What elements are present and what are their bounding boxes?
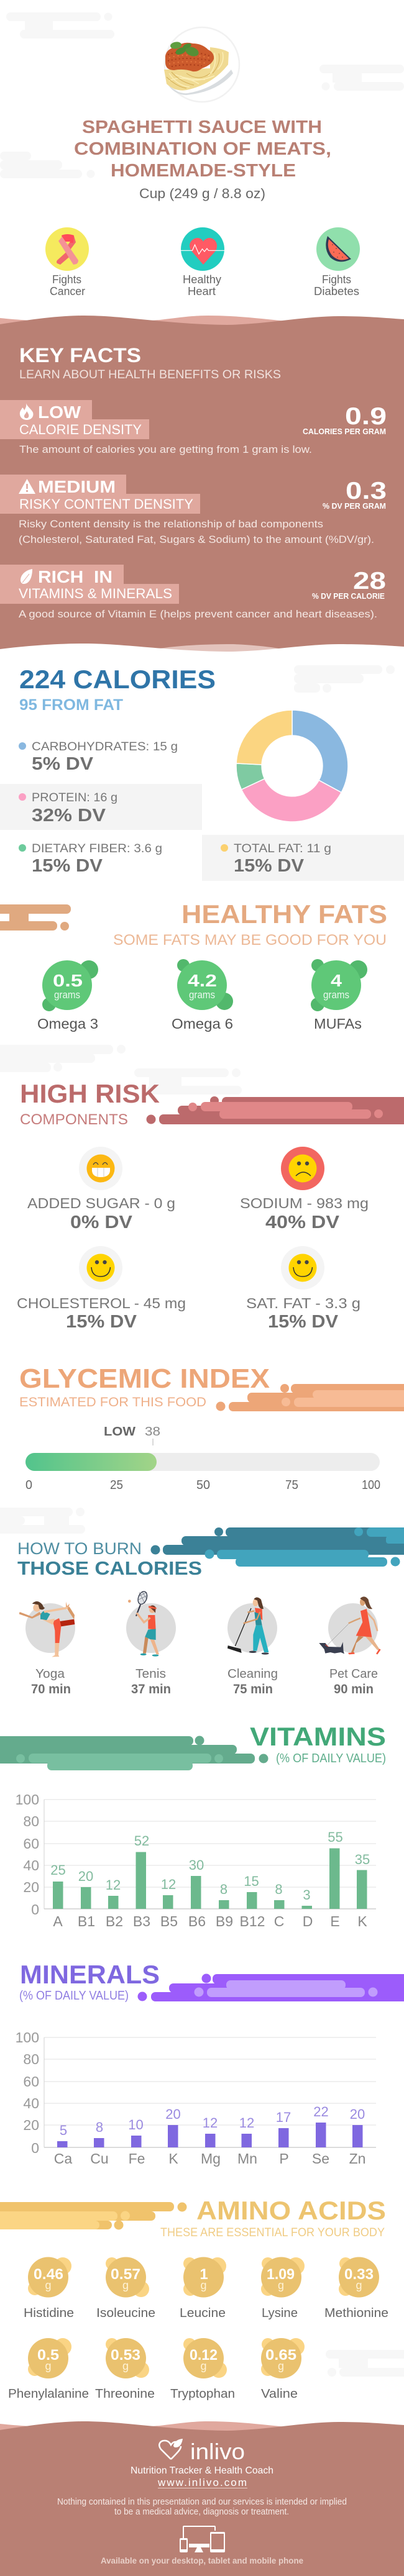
amino: isoleucine: 0.57 — [111, 2266, 140, 2283]
fat: omega 6 — [172, 959, 233, 1032]
inlivo logo: inlivo — [190, 2439, 245, 2464]
glycemic index heading: GLYCEMIC INDEX — [19, 1363, 270, 1394]
background cloud behind high risk — [134, 1068, 242, 1095]
banner: amino acids — [0, 2202, 186, 2230]
bar chart: minerals: 20 — [165, 2106, 181, 2122]
amino: threonine: 0.53 — [111, 2347, 140, 2364]
risk: sodium — [240, 1147, 369, 1232]
fact: low calorie density: CALORIES PER GRAM — [303, 427, 386, 436]
fact: rich in vitamins and minerals: RICH IN — [38, 567, 112, 586]
bar chart: minerals: P — [279, 2150, 289, 2167]
risk: saturated fat — [246, 1246, 360, 1332]
macro: protein — [0, 784, 202, 830]
icon: devices — [180, 2526, 225, 2552]
glycemic index gauge: 50 — [196, 1478, 210, 1492]
fact: medium risky content density: (Cholesterol, Saturated Fat, Sugars & Sodium) to the amount (%DV/gr). — [19, 534, 374, 545]
background cloud left of title — [0, 152, 94, 178]
amino: tryptophan — [170, 2338, 235, 2401]
bar chart: vitamins: D — [303, 1913, 313, 1929]
risk: saturated fat: 15% DV — [268, 1312, 339, 1332]
food photo: spaghetti with sauce on plate — [164, 27, 239, 102]
fact: low calorie density: LOW — [38, 403, 81, 422]
title: COMBINATION OF MEATS, — [74, 139, 331, 159]
amino: valine — [261, 2338, 305, 2401]
amino: histidine: g — [45, 2279, 52, 2292]
fat: omega 6: 4.2 — [188, 971, 217, 990]
bar chart: minerals: 5 — [60, 2123, 67, 2138]
macro: carbohydrates: 5% DV — [32, 754, 94, 774]
amino: phenylalanine — [8, 2338, 89, 2401]
fat: omega 3: grams — [54, 989, 80, 1001]
benefit: fights diabetes — [314, 227, 360, 298]
fat: MUFAs: grams — [323, 989, 349, 1001]
macro: dietary fiber: 15% DV — [32, 856, 103, 876]
benefit: healthy heart: Heart — [188, 285, 216, 298]
amino: methionine: Methionine — [324, 2306, 388, 2320]
bar chart: minerals: 17 — [276, 2109, 291, 2125]
bar chart: vitamins: K — [357, 1913, 367, 1929]
amino: phenylalanine: Phenylalanine — [8, 2387, 89, 2401]
bar chart: minerals: 60 — [23, 2073, 39, 2090]
healthy fats heading: HEALTHY FATS — [181, 899, 387, 929]
benefit: healthy heart: Healthy — [183, 273, 221, 286]
glycemic index subheading: ESTIMATED FOR THIS FOOD — [19, 1395, 206, 1409]
amino acids heading: AMINO ACIDS — [196, 2196, 386, 2225]
inlivo logo — [159, 2439, 245, 2464]
bar chart: minerals: 100 — [16, 2029, 39, 2046]
activity: pet care: 90 min — [334, 1682, 374, 1696]
glycemic index gauge: 100 — [362, 1478, 380, 1492]
benefit: fights diabetes: Diabetes — [314, 285, 359, 298]
risk: saturated fat: SAT. FAT - 3.3 g — [246, 1295, 360, 1311]
tagline: Nutrition Tracker & Health Coach — [131, 2465, 273, 2476]
bar chart: vitamins: B12 — [240, 1913, 265, 1929]
calories from fat: 95 FROM FAT — [19, 696, 123, 714]
bar chart: vitamins: E — [330, 1913, 340, 1929]
glycemic index gauge: LOW — [104, 1425, 135, 1439]
title — [74, 117, 331, 181]
bar chart: minerals: 8 — [96, 2119, 103, 2135]
how to burn heading line 1: HOW TO BURN — [17, 1539, 142, 1558]
amino: threonine: g — [122, 2360, 129, 2372]
risk: added sugar — [27, 1147, 175, 1232]
bar chart: vitamins: B9 — [216, 1913, 233, 1929]
fact: rich in vitamins and minerals: A good source of Vitamin E (helps prevent cancer and heart diseases). — [19, 608, 377, 620]
risk: added sugar: ADDED SUGAR - 0 g — [27, 1195, 175, 1211]
risk: sodium: SODIUM - 983 mg — [240, 1195, 369, 1211]
bar chart: vitamins: 12 — [106, 1877, 121, 1893]
fact: low calorie density: The amount of calories you are getting from 1 gram is low. — [19, 444, 312, 455]
fact: low calorie density: CALORIE DENSITY — [19, 422, 142, 437]
fact: rich in vitamins and minerals: 28 — [353, 568, 386, 594]
bar chart: minerals: 0 — [31, 2140, 39, 2156]
vitamins subheading: (% OF DAILY VALUE) — [276, 1752, 386, 1765]
disclaimer: to be a medical advice, diagnosis or treatment. — [114, 2507, 289, 2517]
amino: tryptophan: g — [200, 2360, 207, 2372]
amino: histidine: 0.46 — [34, 2266, 63, 2283]
macro: total fat: TOTAL FAT: 11 g — [234, 842, 331, 855]
disclaimer: Nothing contained in this presentation and our services is intended or implied — [57, 2497, 347, 2507]
activity: pet care: Pet Care — [329, 1667, 378, 1681]
amino acids subheading: THESE ARE ESSENTIAL FOR YOUR BODY — [160, 2226, 385, 2239]
fact: medium risky content density — [0, 475, 387, 545]
amino: lysine: Lysine — [262, 2306, 298, 2320]
fact: rich in vitamins and minerals: VITAMINS & MINERALS — [19, 586, 172, 601]
title: SPAGHETTI SAUCE WITH — [82, 117, 322, 137]
background cloud top right — [319, 65, 404, 91]
risk: sodium: 40% DV — [265, 1213, 340, 1232]
how to burn heading line 2: THOSE CALORIES — [17, 1557, 202, 1579]
amino: leucine: g — [200, 2279, 207, 2292]
activity: yoga — [19, 1601, 75, 1696]
bar chart: minerals — [16, 2029, 376, 2167]
fact: rich in vitamins and minerals: % DV PER CALORIE — [312, 591, 385, 601]
macro: protein: PROTEIN: 16 g — [32, 791, 117, 804]
availability note: Available on your desktop, tablet and mobile phone — [101, 2556, 303, 2565]
bar chart: vitamins: 25 — [50, 1862, 66, 1878]
bar chart: minerals: 20 — [350, 2106, 365, 2122]
amino: histidine: Histidine — [24, 2306, 74, 2320]
background cloud left of high risk — [0, 1045, 126, 1072]
amino: methionine — [324, 2257, 388, 2320]
bar chart: vitamins: B3 — [133, 1913, 150, 1929]
activity: pet care — [319, 1596, 381, 1696]
fat: omega 3: Omega 3 — [37, 1016, 98, 1032]
fact: medium risky content density: Risky Content density is the relationship of bad components — [19, 518, 323, 530]
key facts heading: KEY FACTS — [19, 344, 141, 366]
bar chart: vitamins: B2 — [106, 1913, 123, 1929]
panel: key facts background — [0, 316, 404, 658]
glycemic index gauge: 38 — [145, 1425, 160, 1439]
amino: leucine: 1 — [200, 2266, 208, 2283]
high risk subheading: COMPONENTS — [20, 1111, 128, 1128]
banner: vitamins — [0, 1736, 269, 1770]
bar chart: minerals: 12 — [203, 2115, 218, 2131]
macro: carbohydrates: CARBOHYDRATES: 15 g — [32, 740, 178, 753]
bar chart: minerals: Ca — [54, 2150, 72, 2167]
amino: methionine: 0.33 — [344, 2266, 374, 2283]
fact: medium risky content density: MEDIUM — [38, 477, 116, 496]
bar chart: vitamins: 0 — [31, 1901, 39, 1918]
amino: leucine: Leucine — [180, 2306, 226, 2320]
bar chart: vitamins: 8 — [275, 1882, 283, 1897]
amino: histidine — [24, 2257, 74, 2320]
bar chart: vitamins: 55 — [328, 1829, 343, 1845]
fact: low calorie density: 0.9 — [345, 403, 387, 430]
high risk heading: HIGH RISK — [20, 1079, 160, 1108]
key facts subheading: LEARN ABOUT HEALTH BENEFITS OR RISKS — [19, 368, 281, 381]
bar chart: vitamins: B6 — [188, 1913, 206, 1929]
glycemic index gauge: 0 — [25, 1478, 32, 1492]
banner: high risk — [147, 1096, 404, 1124]
amino: valine: 0.65 — [265, 2347, 296, 2364]
bar chart: vitamins: 20 — [23, 1879, 39, 1895]
amino: valine: g — [278, 2360, 284, 2372]
activity: tennis: 37 min — [131, 1682, 171, 1696]
amino: threonine: Threonine — [95, 2387, 155, 2401]
activity: tennis — [126, 1590, 176, 1696]
bar chart: minerals: 22 — [313, 2104, 329, 2119]
risk: cholesterol — [17, 1246, 186, 1332]
amino: lysine: g — [278, 2279, 284, 2292]
bar chart: minerals: K — [168, 2150, 178, 2167]
macro: total fat: 15% DV — [234, 856, 305, 876]
amino: phenylalanine: g — [45, 2360, 52, 2372]
amino: threonine — [95, 2338, 155, 2401]
donut chart: macronutrients — [236, 710, 348, 822]
glycemic index gauge — [25, 1425, 380, 1492]
glycemic index gauge: 25 — [110, 1478, 123, 1492]
background cloud right of amino acids — [326, 2350, 404, 2377]
healthy fats subheading: SOME FATS MAY BE GOOD FOR YOU — [113, 932, 387, 949]
bar chart: minerals: Se — [312, 2150, 329, 2167]
benefit: fights cancer: Fights — [52, 273, 81, 286]
bar chart: vitamins: 15 — [244, 1873, 259, 1889]
bar chart: vitamins: 40 — [23, 1857, 39, 1873]
bar chart: vitamins: 80 — [23, 1813, 39, 1829]
bar chart: vitamins: 100 — [16, 1791, 39, 1808]
fat: omega 3: 0.5 — [53, 971, 83, 990]
amino: lysine: 1.09 — [267, 2266, 295, 2283]
bar chart: minerals: 40 — [23, 2095, 39, 2111]
bar chart: minerals: Zn — [349, 2150, 365, 2167]
amino: isoleucine: g — [122, 2279, 129, 2292]
risk: cholesterol: 15% DV — [66, 1312, 137, 1332]
bar chart: minerals: 12 — [239, 2115, 254, 2131]
macro: protein: 32% DV — [32, 806, 106, 826]
banner: how to burn — [150, 1527, 404, 1567]
activity: yoga: 70 min — [31, 1682, 71, 1696]
panel: footer background — [0, 2421, 404, 2576]
fact: low calorie density — [0, 400, 387, 455]
amino: lysine — [261, 2257, 305, 2320]
bar chart: vitamins: 20 — [78, 1868, 93, 1884]
activity: cleaning: 75 min — [233, 1682, 273, 1696]
fat: MUFAs — [311, 959, 367, 1032]
fat: MUFAs: MUFAs — [314, 1016, 362, 1032]
macro: carbohydrates — [19, 740, 178, 774]
calories heading: 224 CALORIES — [19, 665, 216, 694]
activity: cleaning: Cleaning — [227, 1667, 278, 1681]
amino: leucine — [180, 2257, 226, 2320]
fact: medium risky content density: 0.3 — [346, 478, 387, 504]
bar chart: vitamins: 60 — [23, 1836, 39, 1852]
minerals heading: MINERALS — [20, 1960, 160, 1989]
bar chart: vitamins: 12 — [161, 1877, 176, 1892]
macro: total fat — [202, 835, 404, 881]
fat: MUFAs: 4 — [331, 971, 342, 990]
benefit: fights diabetes: Fights — [322, 273, 351, 286]
benefit: healthy heart — [181, 227, 224, 298]
banner: healthy fats — [0, 904, 71, 931]
amino: tryptophan: Tryptophan — [170, 2387, 235, 2401]
banner: glycemic index — [216, 1384, 404, 1411]
minerals subheading: (% OF DAILY VALUE) — [19, 1989, 129, 2003]
vitamins heading: VITAMINS — [250, 1722, 386, 1751]
amino: valine: Valine — [261, 2387, 298, 2401]
benefit: fights cancer — [45, 227, 89, 298]
background cloud top left — [6, 12, 114, 39]
serving size: Cup (249 g / 8.8 oz) — [139, 186, 265, 201]
amino: methionine: g — [356, 2279, 362, 2292]
fat: omega 6: Omega 6 — [172, 1016, 233, 1032]
bar chart: vitamins: B1 — [78, 1913, 95, 1929]
disclaimer — [57, 2497, 347, 2517]
bar chart: minerals: 20 — [23, 2117, 39, 2133]
activity: yoga: Yoga — [35, 1667, 65, 1681]
bar chart: vitamins — [16, 1791, 376, 1929]
title: HOMEMADE-STYLE — [111, 161, 296, 181]
benefit: fights cancer: Cancer — [50, 285, 85, 298]
bar chart: vitamins: 3 — [303, 1887, 311, 1903]
banner: minerals — [138, 1974, 404, 2001]
risk: added sugar: 0% DV — [70, 1213, 133, 1232]
bar chart: vitamins: 8 — [220, 1882, 227, 1897]
bar chart: vitamins: 30 — [189, 1857, 204, 1873]
activity: tennis: Tenis — [135, 1667, 166, 1681]
amino: isoleucine: Isoleucine — [96, 2306, 155, 2320]
glycemic index gauge: 75 — [285, 1478, 298, 1492]
fact: medium risky content density: RISKY CONTENT DENSITY — [19, 496, 193, 512]
fat: omega 6: grams — [189, 989, 215, 1001]
bar chart: minerals: Fe — [129, 2150, 145, 2167]
fat: omega 3 — [37, 960, 98, 1032]
amino: phenylalanine: 0.5 — [37, 2347, 59, 2364]
background cloud above burn section — [0, 1508, 85, 1534]
bar chart: minerals: 80 — [23, 2051, 39, 2067]
fact: rich in vitamins and minerals — [0, 565, 386, 620]
bar chart: vitamins: 52 — [134, 1833, 149, 1849]
bar chart: minerals: Mg — [201, 2150, 221, 2167]
bar chart: vitamins: A — [53, 1913, 63, 1929]
bar chart: vitamins: B5 — [160, 1913, 178, 1929]
activity: cleaning — [227, 1597, 278, 1696]
macro: dietary fiber: DIETARY FIBER: 3.6 g — [32, 842, 162, 855]
fact: medium risky content density: % DV PER GRAM — [323, 501, 386, 511]
amino: tryptophan: 0.12 — [190, 2347, 218, 2364]
bar chart: vitamins: C — [274, 1913, 284, 1929]
bar chart: minerals: 10 — [128, 2117, 144, 2132]
risk: cholesterol: CHOLESTEROL - 45 mg — [17, 1295, 186, 1311]
bar chart: minerals: Mn — [237, 2150, 257, 2167]
website link: www.inlivo.com — [157, 2477, 247, 2488]
amino: isoleucine — [96, 2257, 155, 2320]
background cloud behind calories — [294, 665, 395, 693]
bar chart: minerals: Cu — [90, 2150, 109, 2167]
bar chart: vitamins: 35 — [355, 1852, 370, 1867]
macro: dietary fiber — [19, 842, 162, 876]
